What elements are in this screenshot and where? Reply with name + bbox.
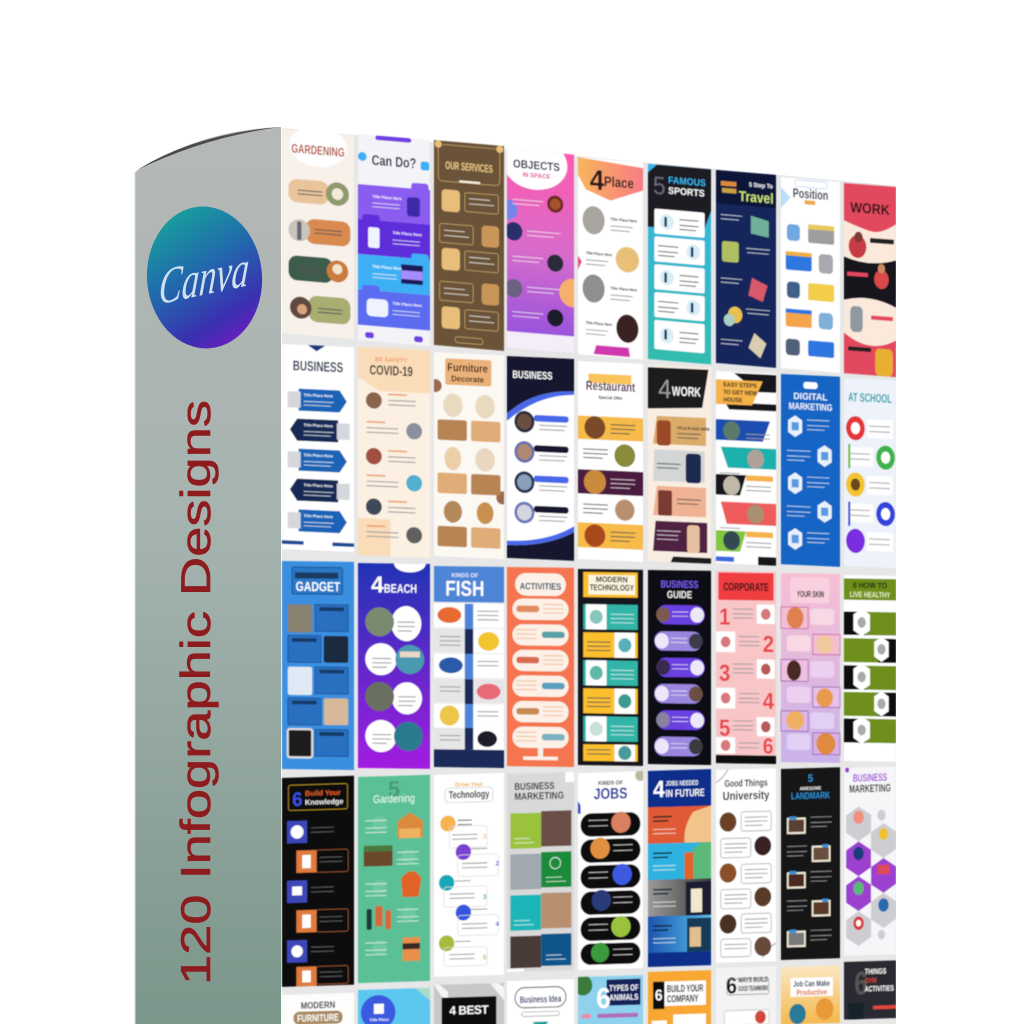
- card rows: 3: [719, 660, 730, 686]
- card rows: [582, 1013, 638, 1019]
- card: Modern Furniture: [282, 993, 354, 1024]
- card: At School: [844, 378, 896, 568]
- card title: CORPORATE: [723, 582, 769, 594]
- card title: Business Idea: [520, 993, 562, 1005]
- card title: 4 BEST: [449, 1002, 489, 1018]
- card: Things Gym Activities: THINGS: [865, 968, 887, 977]
- card title: Good Things: [724, 777, 768, 789]
- card rows: Title Place Here: [372, 194, 403, 201]
- card rows: 2: [496, 860, 500, 867]
- card: 5 Awesome Landmark: LANDMARK: [791, 790, 830, 802]
- card rows: [366, 392, 422, 544]
- box: left face: [135, 127, 281, 1024]
- card: Kinds of Fish: FISH: [445, 576, 484, 601]
- card title: 6: [292, 789, 302, 811]
- card rows: [358, 178, 430, 343]
- card title: GADGET: [296, 579, 340, 594]
- card: Modern Technology: [578, 569, 643, 766]
- card: 5 Things Gardening: Gardening: [373, 793, 415, 806]
- card rows: 4: [496, 921, 500, 928]
- card rows: [787, 815, 832, 948]
- card: Things Gym Activities: GYM: [865, 977, 877, 985]
- card rows: TITLE PLACE HERE: [677, 426, 710, 432]
- card rows: [654, 208, 705, 353]
- card: Build Your Company: COMPANY: [667, 993, 699, 1006]
- card: Business Marketing hexagons: MARKETING: [849, 782, 891, 796]
- card rows: Title Place Here: [611, 217, 637, 224]
- card: Good Things University: University: [723, 789, 770, 803]
- card title: Grow Your: [455, 782, 484, 789]
- card: Restaurant: Special Offer: [599, 395, 623, 401]
- card title: Furniture: [447, 362, 488, 376]
- card title: 6: [655, 988, 663, 1005]
- card rows: [848, 1002, 896, 1019]
- card: Modern Technology: TECHNOLOGY: [590, 583, 634, 593]
- card title: BUSINESS: [661, 579, 699, 591]
- card title: 5: [808, 773, 813, 785]
- card rows: [287, 819, 348, 987]
- card: Be Safety Covid-19: [358, 347, 430, 558]
- card title: WORK: [850, 199, 891, 218]
- card rows: [288, 178, 350, 325]
- card rows: [844, 608, 896, 745]
- card: How to Live Healthy: LIVE HEALTHY: [850, 590, 890, 600]
- card: Digital Marketing: MARKETING: [789, 400, 832, 413]
- card title: 6 HOW TO: [853, 581, 888, 591]
- card: 4 Best Restaurant: [434, 983, 504, 1024]
- card: Digital Marketing: [781, 374, 840, 567]
- card: Gadget: [282, 561, 354, 770]
- card rows: [512, 598, 569, 748]
- card rows: [578, 205, 639, 358]
- card: Job Can Make Productive: [781, 965, 840, 1024]
- card: Things Gym Activities: ACTIVITIES: [865, 985, 894, 994]
- card rows: [648, 806, 711, 953]
- card: 4 Place: Place: [604, 174, 634, 192]
- card title: BUSINESS: [514, 781, 555, 793]
- card: Kinds of Jobs: [578, 770, 646, 970]
- card title: KINDS OF: [451, 573, 479, 579]
- card: 4 Types of Work: WORK: [672, 384, 702, 400]
- card rows: [583, 604, 638, 762]
- card: Activities: [507, 567, 574, 767]
- card rows: 1: [483, 833, 487, 840]
- card title: KINDS OF: [598, 780, 624, 787]
- card: How to Live Healthy: [844, 575, 896, 762]
- card: 4 Place: [578, 157, 643, 360]
- card: Easy Steps to Get New House: HOUSE: [723, 397, 743, 405]
- card rows: [653, 416, 711, 564]
- card title: BUSINESS: [853, 772, 888, 785]
- card title: 5 Step To: [749, 182, 773, 191]
- card rows: [522, 1011, 559, 1024]
- mask: right edge of the grid: [896, 0, 1024, 1024]
- card rows: [720, 811, 771, 957]
- card: Work: [844, 183, 896, 377]
- card rows: Title Place Here: [304, 482, 334, 489]
- card rows: Title Place Here: [586, 251, 612, 257]
- card: 6 Types of Animals: TYPES OF: [609, 983, 638, 993]
- card title: BE SAFETY: [375, 357, 407, 365]
- card: Business Idea: [507, 979, 574, 1024]
- card title: Position: [793, 185, 828, 203]
- card rows: Title Place Here: [372, 264, 403, 271]
- card rows: [581, 811, 640, 965]
- card title: 4: [653, 776, 665, 803]
- card rows: Title Place Here: [304, 392, 334, 399]
- card: Sky-blue circle template: [358, 988, 430, 1024]
- logo: Canva circle: [142, 203, 267, 352]
- card: What hobbies Can Do?: [358, 134, 430, 346]
- card rows: [781, 607, 840, 755]
- card rows: Title Place Here: [611, 286, 637, 293]
- card: 4 Amazing Beach: BEACH: [384, 582, 417, 596]
- card: Corporate: [716, 571, 776, 764]
- card rows: [654, 605, 705, 757]
- card: 4 Jobs Needed in Future: [648, 769, 711, 967]
- card rows: Title Place Here: [586, 321, 612, 327]
- card: Business Marketing grey: [507, 772, 574, 972]
- card rows: [288, 604, 348, 758]
- card title: GARDENING: [291, 141, 345, 160]
- card rows: [786, 199, 834, 359]
- grid backdrop: [282, 128, 896, 1024]
- card: Build Your Company: BUILD YOUR: [667, 983, 704, 996]
- card title: 4: [371, 571, 384, 598]
- card title: OBJECTS: [513, 158, 560, 174]
- card: Same Best Position: [781, 177, 840, 373]
- card title: 5: [388, 776, 400, 802]
- card rows: [364, 812, 423, 962]
- card: Business Marketing grey: MARKETING: [514, 790, 564, 803]
- card rows: Title Place Here: [393, 230, 423, 238]
- template card grid: [282, 123, 896, 1024]
- logo: Canva circle: Canva: [157, 241, 251, 317]
- card: 5 Things Gardening: [358, 775, 430, 983]
- card rows: Title Place: [370, 1017, 390, 1022]
- card: How to Grow Business: [282, 344, 354, 552]
- card rows: [440, 179, 499, 346]
- card rows: [505, 191, 574, 354]
- card rows: 5: [483, 954, 487, 962]
- card: 5 Famous Sports: [648, 164, 711, 364]
- card: Grow Your Technology: Technology: [449, 789, 490, 801]
- card: Build Your Company: [648, 970, 711, 1024]
- card rows: [787, 415, 832, 552]
- card: Objects in Space: IN SPACE: [522, 171, 550, 181]
- card rows: [716, 603, 775, 759]
- card rows: 3: [483, 894, 487, 901]
- card rows: 2: [763, 631, 774, 657]
- card rows: [721, 181, 770, 359]
- card: 5 Step To Travel: Travel: [739, 188, 774, 207]
- card rows: [724, 978, 769, 1024]
- card rows: Title Place Here: [304, 513, 334, 519]
- card rows: 1: [719, 603, 730, 630]
- card rows: [429, 379, 509, 549]
- card rows: 6: [763, 734, 773, 759]
- card: 6 Build Your Knowledge: [282, 776, 354, 987]
- card title: MODERN: [596, 575, 628, 584]
- card rows: [514, 410, 569, 525]
- card title: BUSINESS: [512, 370, 553, 383]
- card: 6 Build Your Knowledge: Build Your: [305, 788, 341, 798]
- card rows: Title Place Here: [304, 452, 334, 459]
- card: 5 Step To Travel: [716, 170, 776, 368]
- card title: BUSINESS: [293, 358, 343, 375]
- card: Things Gym Activities: [844, 960, 896, 1020]
- card rows: 5: [719, 714, 730, 741]
- card: 4 Jobs Needed in Future: IN FUTURE: [666, 787, 705, 800]
- card title: 6: [726, 974, 737, 999]
- card: Restaurant: [578, 361, 643, 562]
- card: 4 Jobs Needed in Future: JOBS NEEDED: [666, 780, 699, 788]
- card: Grow Your Technology: [434, 773, 504, 977]
- card rows: [847, 231, 894, 377]
- card: Our Services: [434, 140, 504, 351]
- card: Easy Steps to Get New House: [716, 371, 776, 566]
- card rows: [510, 810, 571, 968]
- card: 6 Ways Build Good Teamwork: GOOD TEAMWORK: [738, 985, 768, 993]
- card: 5 Awesome Landmark: AWESOME: [800, 785, 821, 791]
- card title: AT SCHOOL: [848, 391, 892, 406]
- card rows: [434, 603, 504, 750]
- card rows: [578, 415, 643, 550]
- card title: ACTIVITIES: [520, 581, 561, 592]
- card: Objects in Space: [506, 150, 575, 354]
- card: Business Guide: [648, 570, 711, 765]
- card: 5 Famous Sports: SPORTS: [668, 185, 705, 199]
- card: 6 Types of Animals: [574, 974, 643, 1024]
- card rows: Title Place Here: [393, 301, 423, 308]
- card rows: [716, 419, 776, 566]
- card: Furniture Decorate: [433, 352, 505, 559]
- card title: 6: [854, 966, 868, 1003]
- card title: 4: [658, 375, 671, 405]
- card: 6 Build Your Knowledge: Knowledge: [305, 797, 343, 807]
- card: Your Skin: [781, 573, 840, 763]
- card title: MODERN: [301, 1000, 335, 1011]
- card: Business Marketing hexagons: [844, 766, 896, 956]
- card: Kinds of Fish: [434, 566, 504, 768]
- card title: Restaurant: [586, 378, 635, 395]
- card title: YOUR SKIN: [797, 589, 824, 599]
- card: Job Can Make Productive: Productive: [796, 987, 827, 998]
- card: Be Safety Covid-19: COVID-19: [370, 362, 413, 379]
- card title: FAMOUS: [668, 175, 706, 189]
- card title: Job Can Make: [793, 978, 830, 989]
- card rows: Title Place Here: [304, 422, 334, 429]
- card title: EASY STEPS: [723, 382, 757, 390]
- card rows: [652, 1013, 706, 1024]
- card: 6 Ways Build Good Teamwork: WAYS BUILD: [738, 976, 768, 985]
- card: 5 Awesome Landmark: [781, 767, 840, 960]
- card title: 6: [596, 981, 611, 1014]
- card title: Can Do?: [372, 151, 416, 171]
- card: 6 Types of Animals: ANIMALS: [609, 992, 639, 1003]
- card: 5 Famous Sports: 5: [653, 172, 666, 201]
- card rows: [365, 606, 424, 753]
- card: Good Things University: [716, 768, 776, 963]
- card: 4 Amazing Beach: [358, 554, 430, 769]
- card title: OUR SERVICES: [445, 160, 493, 176]
- card rows: [846, 805, 896, 946]
- card: Kinds of Jobs: JOBS: [594, 786, 627, 803]
- card: Easy Steps to Get New House: TO GET NEW: [723, 390, 758, 398]
- card: 6 Ways Build Good Teamwork: [716, 966, 776, 1024]
- card title: DIGITAL: [793, 390, 828, 403]
- card rows: [846, 416, 895, 555]
- card title: 4: [590, 163, 604, 196]
- box title: vertical text: 120 Infographic Designs: [172, 400, 219, 985]
- card rows: [439, 787, 500, 967]
- card rows: [789, 998, 834, 1024]
- card: Brand New Business: [507, 356, 574, 561]
- card: Business Guide: GUIDE: [667, 590, 692, 601]
- card: 4 Types of Work: [648, 365, 711, 564]
- card rows: 4: [763, 688, 775, 714]
- card rows: [282, 388, 354, 547]
- card: How to Gardening: [282, 123, 354, 339]
- card: Furniture Decorate: Decorate: [451, 374, 485, 385]
